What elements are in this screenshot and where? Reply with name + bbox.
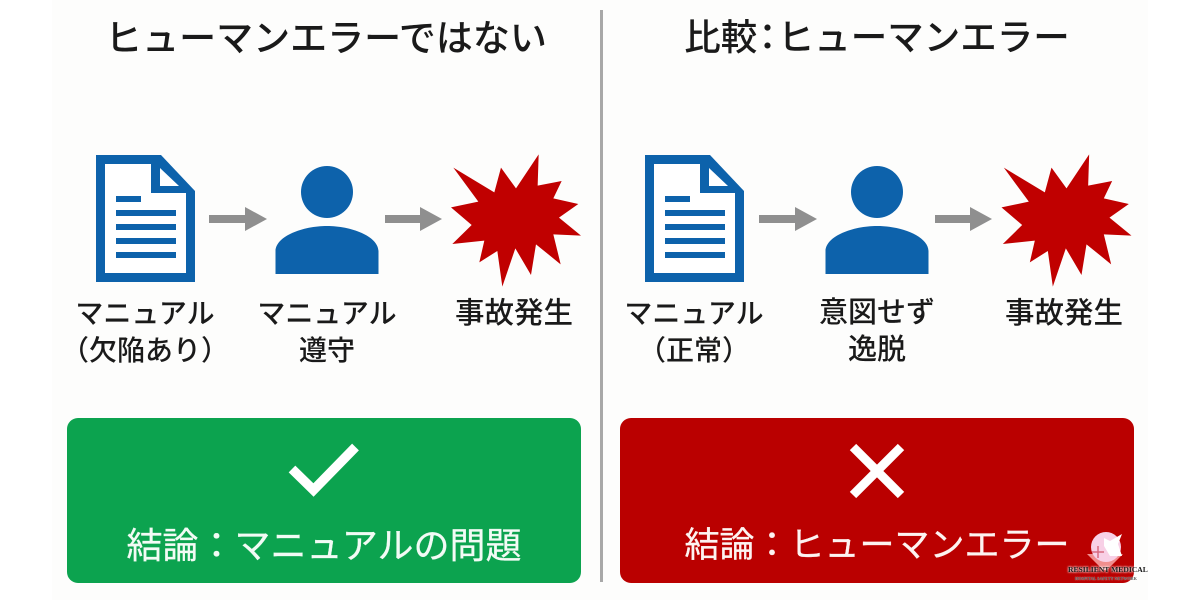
icon: burst right (1001, 154, 1131, 287)
label: manual compliance: 遵守 (299, 335, 355, 366)
icon: burst left (451, 154, 581, 287)
label: manual compliance: マニュアル (257, 298, 397, 329)
label: manual defective (61, 298, 229, 366)
label: manual defective: マニュアル (75, 298, 215, 329)
title: right: 比較：ヒューマンエラー (684, 17, 1070, 58)
arrow: left 2 (385, 207, 442, 231)
icon: document left (96, 155, 195, 282)
arrow: left 1 (209, 207, 267, 231)
panel: red conclusion (620, 418, 1134, 583)
arrow: right 2 (935, 207, 992, 231)
panel: green conclusion (67, 418, 581, 583)
icon: cross mark (850, 444, 904, 498)
label: manual normal (624, 298, 764, 366)
logo: Resilient Medical: HOSPITAL SAFETY NETWORK (1075, 576, 1137, 581)
logo: Resilient Medical: RESILIENT MEDICAL (1068, 565, 1148, 574)
label: accident right: 事故発生 (1005, 297, 1123, 330)
label: manual normal: マニュアル (624, 298, 764, 329)
icon: person right (826, 166, 928, 274)
label: unintentional deviation: 意図せず (819, 297, 935, 329)
title: left: ヒューマンエラーではない (105, 18, 547, 59)
logo: Resilient Medical (1066, 532, 1148, 581)
label: manual defective: （欠陥あり） (61, 335, 229, 366)
icon: check mark (288, 444, 359, 497)
arrow: right 1 (759, 207, 817, 231)
label: manual compliance (257, 298, 397, 366)
divider (600, 10, 603, 582)
conclusion text right: 結論：ヒューマンエラー (684, 526, 1070, 565)
label: accident left: 事故発生 (455, 297, 573, 330)
label: manual normal: （正常） (638, 335, 750, 366)
icon: person left (276, 166, 378, 274)
label: unintentional deviation: 逸脱 (848, 334, 906, 366)
label: unintentional deviation (819, 297, 935, 366)
conclusion text left: 結論：マニュアルの問題 (127, 525, 521, 566)
icon: document right (645, 155, 744, 282)
